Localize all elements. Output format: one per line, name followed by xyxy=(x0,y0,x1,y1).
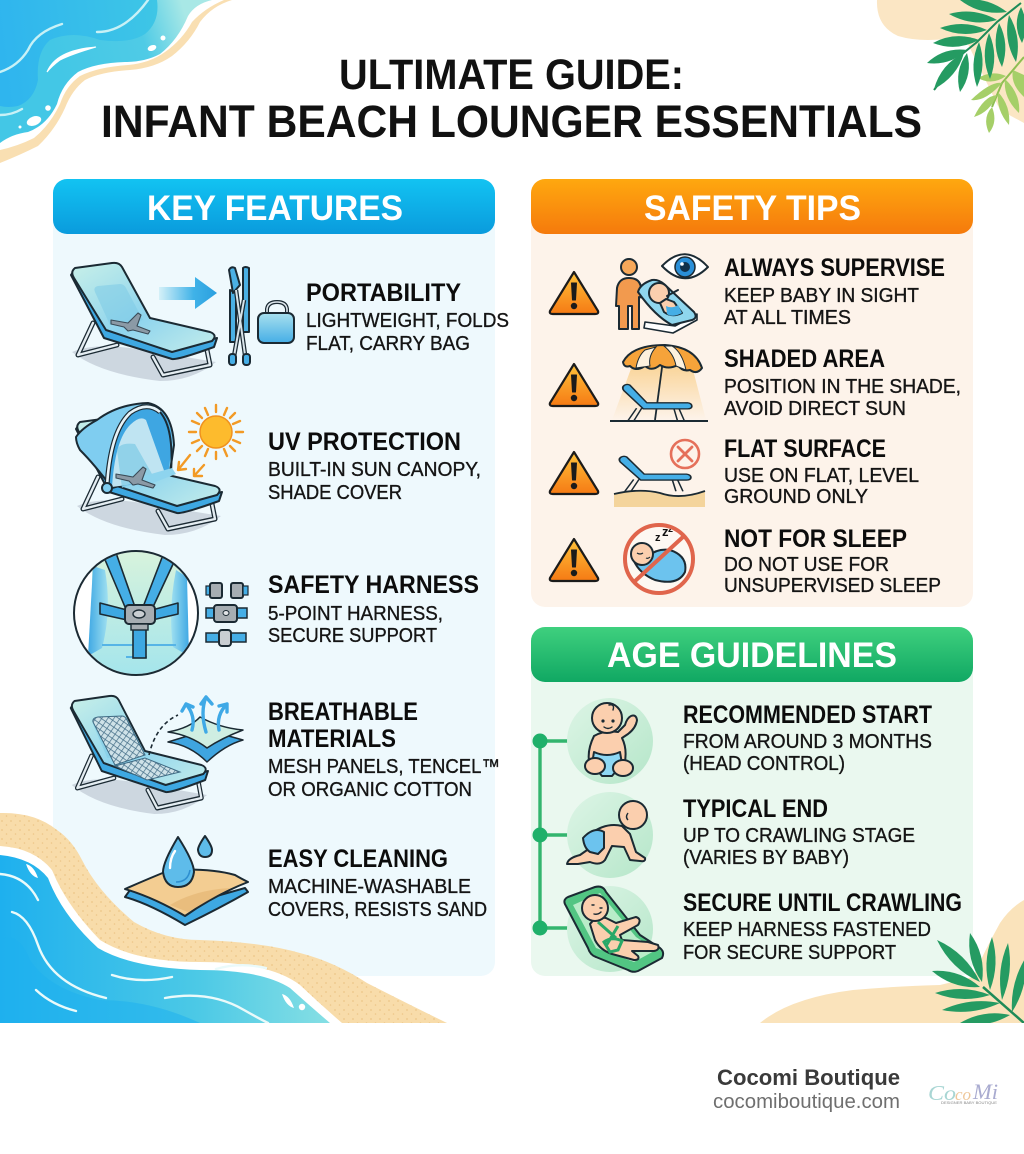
icon: mesh lounger with airflow xyxy=(71,696,243,814)
icon: no sleeping baby: z xyxy=(668,524,673,535)
text: secure until crawling: KEEP HARNESS FASTENED xyxy=(683,919,931,941)
text: always supervise: AT ALL TIMES xyxy=(724,307,851,329)
text: recommended start xyxy=(683,701,932,775)
text: portability: PORTABILITY xyxy=(306,279,461,307)
tip: always supervise xyxy=(550,254,945,333)
text: safety harness: 5-POINT HARNESS, xyxy=(268,603,443,625)
icon: crawling baby xyxy=(567,792,653,878)
age: secure until crawling xyxy=(564,886,962,972)
text: flat surface: FLAT SURFACE xyxy=(724,435,886,463)
text: easy cleaning: MACHINE-WASHABLE xyxy=(268,876,471,898)
icon: warning triangle xyxy=(550,364,598,406)
tip: not for sleep xyxy=(550,524,941,597)
text: safety harness xyxy=(268,571,479,647)
text: breathable materials xyxy=(268,698,500,801)
text: typical end: TYPICAL END xyxy=(683,795,828,823)
icon: harness close-up and buckles xyxy=(74,550,248,676)
feature: breathable materials xyxy=(71,696,500,814)
text: always supervise: KEEP BABY IN SIGHT xyxy=(724,285,919,307)
icon: sitting baby waving xyxy=(567,698,653,784)
text: shaded area: SHADED AREA xyxy=(724,345,885,373)
decoration: bottom-right palm xyxy=(932,933,1024,1025)
text: uv protection xyxy=(268,428,481,504)
footer: logo: Co xyxy=(928,1081,956,1105)
title: INFANT BEACH LOUNGER ESSENTIALS xyxy=(101,96,922,147)
footer background xyxy=(0,1023,1024,1154)
footer: brand name and website xyxy=(713,1065,900,1113)
text: easy cleaning: EASY CLEANING xyxy=(268,845,448,873)
text: always supervise: ALWAYS SUPERVISE xyxy=(724,254,945,282)
title xyxy=(101,51,922,147)
heading: key features: KEY FEATURES xyxy=(147,189,403,228)
text: recommended start: FROM AROUND 3 MONTHS xyxy=(683,731,932,753)
text: secure until crawling xyxy=(683,889,962,964)
footer: brand name and website: cocomiboutique.com xyxy=(713,1091,900,1113)
footer: logo: DESIGNER BABY BOUTIQUE xyxy=(941,1101,998,1105)
age: typical end xyxy=(567,792,915,878)
title: ULTIMATE GUIDE: xyxy=(339,51,684,99)
age timeline xyxy=(532,734,568,936)
text: shaded area xyxy=(724,345,961,420)
feature: uv protection xyxy=(76,403,481,535)
decoration: bottom-left sand and water xyxy=(0,813,447,1023)
panel: safety tips xyxy=(531,179,973,607)
text: safety harness: SAFETY HARNESS xyxy=(268,571,479,599)
footer: logo: co xyxy=(955,1085,971,1104)
icon: warning triangle xyxy=(550,452,598,494)
icon: lounger folding into carry bag xyxy=(71,263,294,381)
decoration: top-left water and sand xyxy=(0,0,232,163)
tip: shaded area xyxy=(550,345,961,421)
text: recommended start: RECOMMENDED START xyxy=(683,701,932,729)
icon: no sleeping baby xyxy=(625,524,693,593)
icon: baby harnessed in green lounger xyxy=(564,886,663,972)
footer: logo xyxy=(928,1079,998,1105)
icon: warning triangle xyxy=(550,539,598,581)
text: portability: FLAT, CARRY BAG xyxy=(306,333,470,355)
icon: adult watching baby xyxy=(616,254,708,333)
text: portability: LIGHTWEIGHT, FOLDS xyxy=(306,310,509,332)
panel: age guidelines xyxy=(531,627,973,976)
footer: logo: Mi xyxy=(972,1079,998,1104)
text: not for sleep: DO NOT USE FOR xyxy=(724,554,889,576)
footer: brand name and website: Cocomi Boutique xyxy=(717,1065,900,1090)
tip: flat surface xyxy=(550,435,919,508)
feature: easy cleaning xyxy=(125,836,487,925)
text: not for sleep: UNSUPERVISED SLEEP xyxy=(724,575,941,597)
text: typical end: UP TO CRAWLING STAGE xyxy=(683,825,915,847)
icon: lounger on uneven sand xyxy=(614,440,705,507)
feature: portability xyxy=(71,263,509,381)
text: secure until crawling: FOR SECURE SUPPORT xyxy=(683,942,896,964)
feature: safety harness xyxy=(74,550,479,676)
icon: no sleeping baby: z xyxy=(655,532,661,544)
decoration: top-right sand and palm xyxy=(877,0,1024,133)
panel: key features xyxy=(53,179,495,976)
text: shaded area: POSITION IN THE SHADE, xyxy=(724,376,961,398)
heading: safety tips: SAFETY TIPS xyxy=(644,189,861,228)
age: recommended start xyxy=(567,698,932,784)
heading: age guidelines: AGE GUIDELINES xyxy=(607,636,897,675)
text: not for sleep: NOT FOR SLEEP xyxy=(724,525,907,553)
text: not for sleep xyxy=(724,525,941,597)
text: portability xyxy=(306,279,509,355)
text: always supervise xyxy=(724,254,945,329)
text: uv protection: UV PROTECTION xyxy=(268,428,461,456)
text: shaded area: AVOID DIRECT SUN xyxy=(724,398,906,420)
text: breathable materials: BREATHABLE xyxy=(268,698,418,726)
icon: umbrella shade over lounger xyxy=(610,345,708,421)
text: easy cleaning: COVERS, RESISTS SAND xyxy=(268,899,487,921)
text: uv protection: BUILT-IN SUN CANOPY, xyxy=(268,459,481,481)
text: breathable materials: OR ORGANIC COTTON xyxy=(268,779,472,801)
text: safety harness: SECURE SUPPORT xyxy=(268,625,437,647)
text: breathable materials: MESH PANELS, TENCEL™ xyxy=(268,756,500,778)
text: flat surface: GROUND ONLY xyxy=(724,486,868,508)
decoration: bottom-right sand xyxy=(760,900,1024,1023)
text: flat surface: USE ON FLAT, LEVEL xyxy=(724,465,919,487)
text: typical end xyxy=(683,795,915,869)
text: easy cleaning xyxy=(268,845,487,921)
text: uv protection: SHADE COVER xyxy=(268,482,402,504)
text: secure until crawling: SECURE UNTIL CRAWLING xyxy=(683,889,962,917)
icon: canopy lounger and sun xyxy=(76,403,243,535)
text: flat surface xyxy=(724,435,919,508)
text: typical end: (VARIES BY BABY) xyxy=(683,847,849,869)
text: breathable materials: MATERIALS xyxy=(268,725,396,753)
icon: water drops on sandy fabric xyxy=(125,836,248,925)
icon: warning triangle xyxy=(550,272,598,314)
text: recommended start: (HEAD CONTROL) xyxy=(683,753,845,775)
icon: no sleeping baby: z xyxy=(662,524,669,539)
